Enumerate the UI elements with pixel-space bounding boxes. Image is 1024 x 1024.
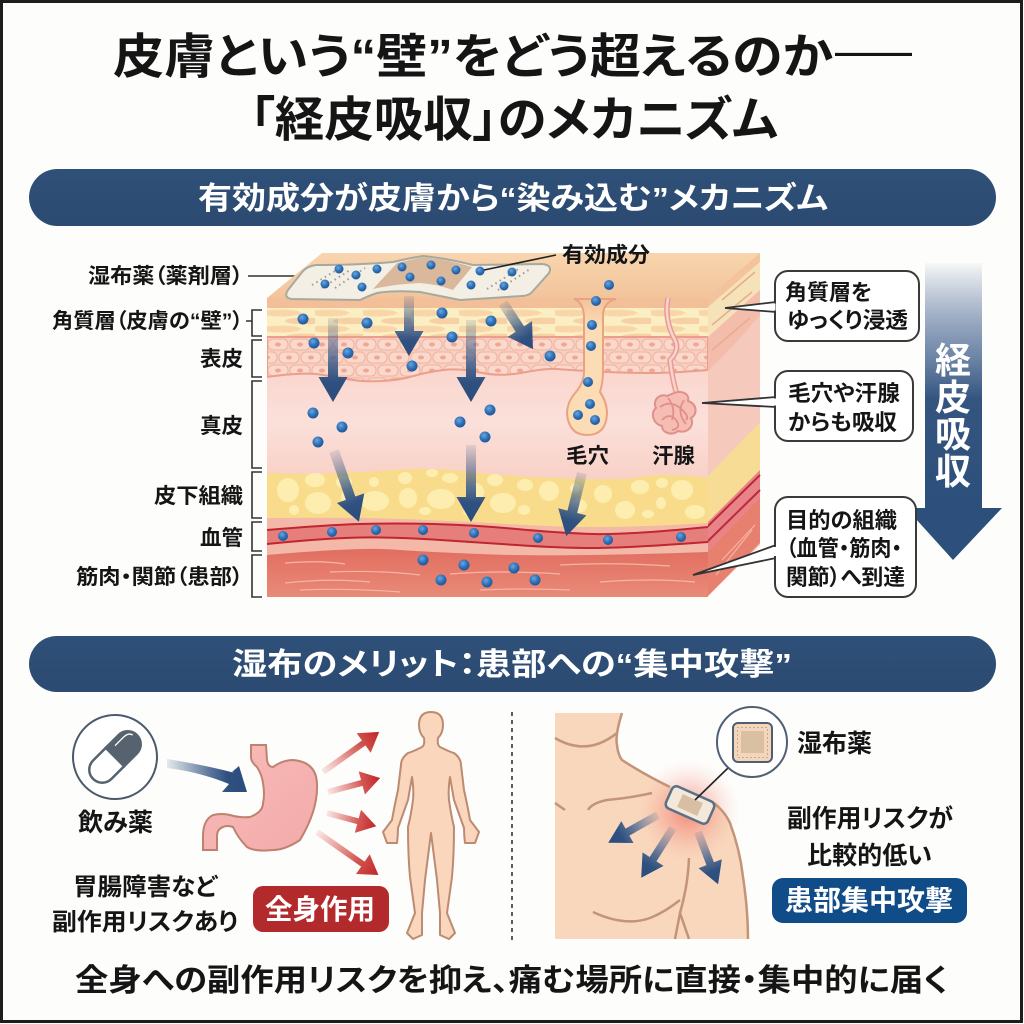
left layer labels: 皮下組織 <box>154 485 243 508</box>
text: side effect risk <box>52 874 238 936</box>
title <box>113 24 912 147</box>
shoulder illustration <box>555 713 748 939</box>
callout: pores and sweat glands <box>702 371 913 441</box>
divider <box>511 712 513 940</box>
skin cross-section diagram <box>267 243 760 597</box>
panel: oral medicine <box>52 712 479 939</box>
sweat gland <box>653 298 696 433</box>
icon: capsule <box>73 715 157 799</box>
large vertical arrow: transdermal absorption: 吸 <box>935 414 971 455</box>
blue spreading arrows <box>602 804 730 889</box>
top band <box>267 298 708 309</box>
panel: patch <box>555 707 967 939</box>
left layer labels: 血管 <box>200 527 243 550</box>
applied patch <box>664 785 716 825</box>
epidermis <box>267 337 708 381</box>
layer brackets <box>246 276 312 597</box>
callout: target tissue: 目的の組織 <box>786 508 897 533</box>
callout: target tissue: （血管・筋肉・ <box>786 536 902 561</box>
badge: systemic action <box>253 886 389 932</box>
text: low side effect risk: 比較的低い <box>807 842 932 870</box>
left layer labels <box>52 265 243 589</box>
section banner: merits: 湿布のメリット：患部への“集中攻撃” <box>232 647 792 682</box>
blood vessel <box>267 524 708 548</box>
label: pore: 毛穴 <box>566 445 609 468</box>
text: low side effect risk <box>787 804 953 870</box>
callout: stratum corneum: 角質層を <box>785 280 872 305</box>
section banner: mechanism: 有効成分が皮膚から“染み込む”メカニズム <box>198 181 828 216</box>
label: active ingredient <box>484 243 650 270</box>
arrow: pill to stomach <box>167 759 247 792</box>
icon: magnified patch <box>695 707 787 800</box>
title: —— <box>835 24 912 76</box>
icon: stomach <box>203 745 317 851</box>
dermis <box>267 370 708 480</box>
label: patch: 湿布薬 <box>797 730 872 758</box>
stratum corneum <box>267 308 708 338</box>
callout: target tissue <box>693 497 916 597</box>
left layer labels: 湿布薬（薬剤層） <box>88 265 243 288</box>
callout: stratum corneum: ゆっくり浸透 <box>787 308 908 333</box>
label: active ingredient: 有効成分 <box>562 243 650 267</box>
hair follicle <box>567 299 616 435</box>
muscle streaks <box>285 562 695 592</box>
icon: human body <box>383 712 479 939</box>
top face of skin block <box>267 253 760 298</box>
callout: stratum corneum <box>725 271 919 341</box>
large vertical arrow: transdermal absorption <box>906 263 1002 560</box>
title: 「経皮吸収」のメカニズム <box>250 94 778 147</box>
left layer labels: 真皮 <box>200 415 243 438</box>
large vertical arrow: transdermal absorption: 皮 <box>935 377 971 418</box>
active ingredient particles <box>278 260 686 588</box>
section banner: mechanism <box>29 169 996 226</box>
badge: systemic action: 全身作用 <box>265 894 375 925</box>
red systemic arrows <box>310 722 386 885</box>
label: sweat gland: 汗腺 <box>652 445 695 468</box>
front face layers <box>267 298 708 597</box>
section banner: merits <box>29 636 996 692</box>
bottom summary: 全身への副作用リスクを抑え、痛む場所に直接・集中的に届く <box>75 963 948 998</box>
badge: focused attack: 患部集中攻撃 <box>785 885 953 916</box>
callout: pores and sweat glands: 毛穴や汗腺 <box>788 381 900 406</box>
badge: focused attack <box>772 878 967 923</box>
text: side effect risk: 副作用リスクあり <box>52 909 238 936</box>
blue absorption arrows <box>318 295 596 540</box>
medicated patch <box>286 256 550 300</box>
right face of skin block <box>707 253 760 597</box>
text: low side effect risk: 副作用リスクが <box>787 804 953 833</box>
left layer labels: 角質層（皮膚の“壁”） <box>52 309 243 333</box>
subcutaneous fat <box>267 469 708 527</box>
callout: target tissue: 関節）へ到達 <box>786 565 905 590</box>
large vertical arrow: transdermal absorption: 収 <box>935 451 971 492</box>
text: side effect risk: 胃腸障害など <box>73 874 219 901</box>
left layer labels: 筋肉・関節（患部） <box>76 566 243 589</box>
left layer labels: 表皮 <box>200 348 243 371</box>
fat cells <box>277 469 705 519</box>
title: 皮膚という“壁”をどう超えるのか <box>113 31 834 84</box>
label: oral medicine: 飲み薬 <box>78 809 153 837</box>
muscle <box>267 549 708 597</box>
large vertical arrow: transdermal absorption: 経 <box>935 340 971 381</box>
callout: pores and sweat glands: からも吸収 <box>788 410 897 435</box>
